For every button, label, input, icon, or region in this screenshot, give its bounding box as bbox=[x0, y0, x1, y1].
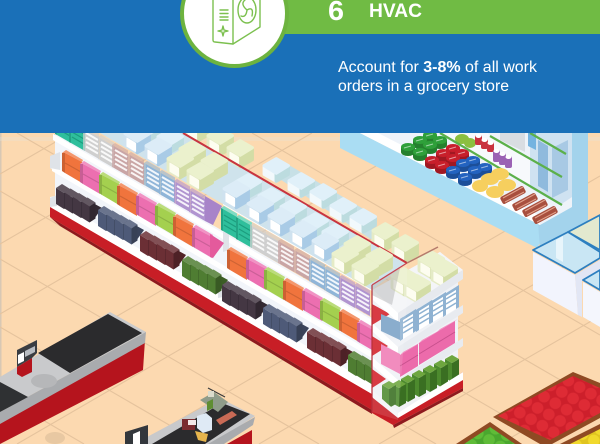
gray counter top bbox=[0, 312, 146, 412]
back row underlay bbox=[263, 158, 407, 263]
case base band bbox=[340, 133, 540, 248]
green shelf rails bbox=[440, 133, 566, 205]
floor stain bbox=[45, 432, 65, 444]
counter two lip bbox=[208, 417, 255, 444]
red top rail bbox=[183, 133, 407, 263]
floor bbox=[0, 133, 600, 444]
icon: hvac unit bbox=[213, 0, 260, 44]
icon circle bbox=[182, 0, 287, 66]
freezer 3 bbox=[583, 270, 600, 327]
level one shelf and cakes bbox=[373, 252, 463, 322]
red base bbox=[50, 207, 372, 410]
end cap back bbox=[372, 252, 458, 414]
basket and goods bbox=[182, 388, 237, 442]
produce bins bbox=[456, 372, 600, 444]
black belt bbox=[38, 314, 142, 373]
blue background bbox=[0, 0, 600, 133]
body text: orders in a grocery store bbox=[338, 78, 509, 95]
end cap of shelf bbox=[372, 247, 463, 428]
glass door stripes bbox=[528, 133, 572, 205]
freezer 1 bbox=[533, 232, 600, 317]
red apples bin bbox=[493, 372, 600, 444]
glass side panel bbox=[372, 247, 438, 420]
dark box row bbox=[56, 184, 394, 390]
card reader two bbox=[125, 425, 148, 444]
title: HVAC bbox=[369, 1, 422, 22]
body text bbox=[338, 59, 537, 95]
green title band bbox=[270, 0, 600, 34]
level three pink boxes bbox=[373, 319, 463, 388]
green apples bin bbox=[456, 422, 522, 444]
checkout counter two bbox=[125, 388, 255, 444]
red back slivers bbox=[372, 304, 390, 388]
striped boxes row bbox=[55, 133, 370, 316]
body text: Account for 3-8% of all work bbox=[338, 59, 537, 76]
yellow fruit bin bbox=[560, 424, 600, 444]
case interior bbox=[360, 133, 572, 225]
second black belt bbox=[0, 382, 28, 412]
yellow cheese bbox=[472, 168, 516, 198]
back row cakes bbox=[166, 104, 417, 261]
shelf body bbox=[50, 133, 372, 394]
black belt two bbox=[152, 403, 250, 444]
blue packs bbox=[446, 156, 492, 186]
shelf products bbox=[55, 133, 372, 384]
upper shelf products bbox=[455, 133, 525, 168]
front row cakes bbox=[125, 127, 377, 284]
uprights bbox=[50, 152, 229, 298]
level four green boxes bbox=[373, 355, 463, 418]
case end panel bbox=[538, 133, 588, 250]
middle row cakes bbox=[116, 105, 391, 274]
red packs bbox=[425, 144, 469, 174]
lower shelf lip bbox=[360, 133, 540, 225]
red counter front bbox=[0, 340, 145, 444]
red end base bbox=[372, 372, 463, 425]
freezer cases bbox=[533, 215, 600, 327]
green packs bbox=[401, 131, 447, 161]
shelf lips bbox=[52, 134, 372, 394]
level two striped boxes bbox=[373, 285, 463, 355]
card reader bbox=[17, 340, 37, 377]
freezer 2 bbox=[568, 215, 600, 250]
top shelf surface bbox=[100, 133, 407, 290]
refrigerated case bbox=[340, 131, 588, 250]
header panel bbox=[0, 0, 600, 133]
bacon packs bbox=[500, 185, 558, 225]
colour block row bbox=[62, 150, 378, 353]
counter two red front bbox=[227, 430, 252, 444]
upper shelf shelves bbox=[440, 133, 562, 205]
counter two rim bbox=[147, 398, 255, 444]
scale pad bbox=[31, 374, 57, 388]
gondola shelf bbox=[50, 104, 417, 414]
checkout counter one bbox=[0, 312, 146, 444]
